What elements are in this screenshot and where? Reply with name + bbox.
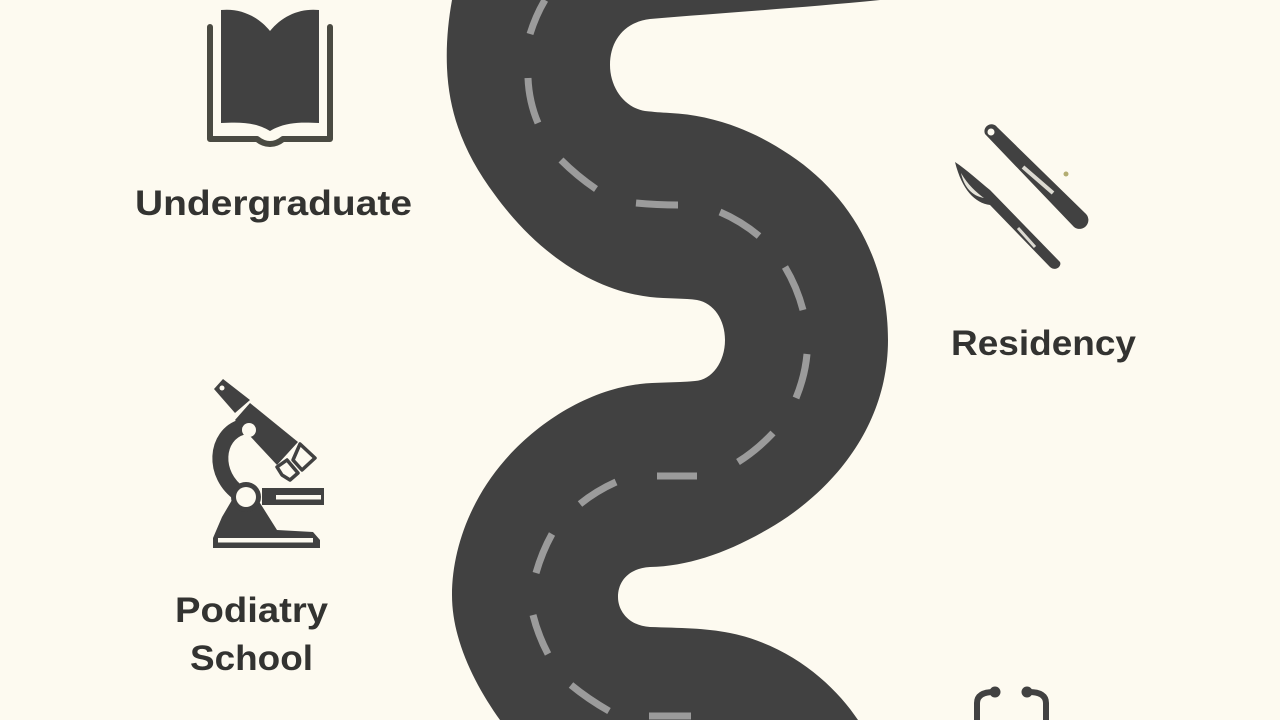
icon: stethoscope [977,686,1046,720]
label: Podiatry School: Podiatry [175,591,329,630]
winding road [447,0,888,720]
icon: microscope [213,379,324,548]
label: Podiatry School: School [190,639,313,678]
label: Podiatry School [175,591,329,678]
label: Undergraduate: Undergraduate [135,184,412,223]
road centre dashes [528,0,807,716]
label: Residency: Residency [951,324,1137,363]
icon: open book [210,10,330,144]
icon: scalpels [955,124,1088,269]
